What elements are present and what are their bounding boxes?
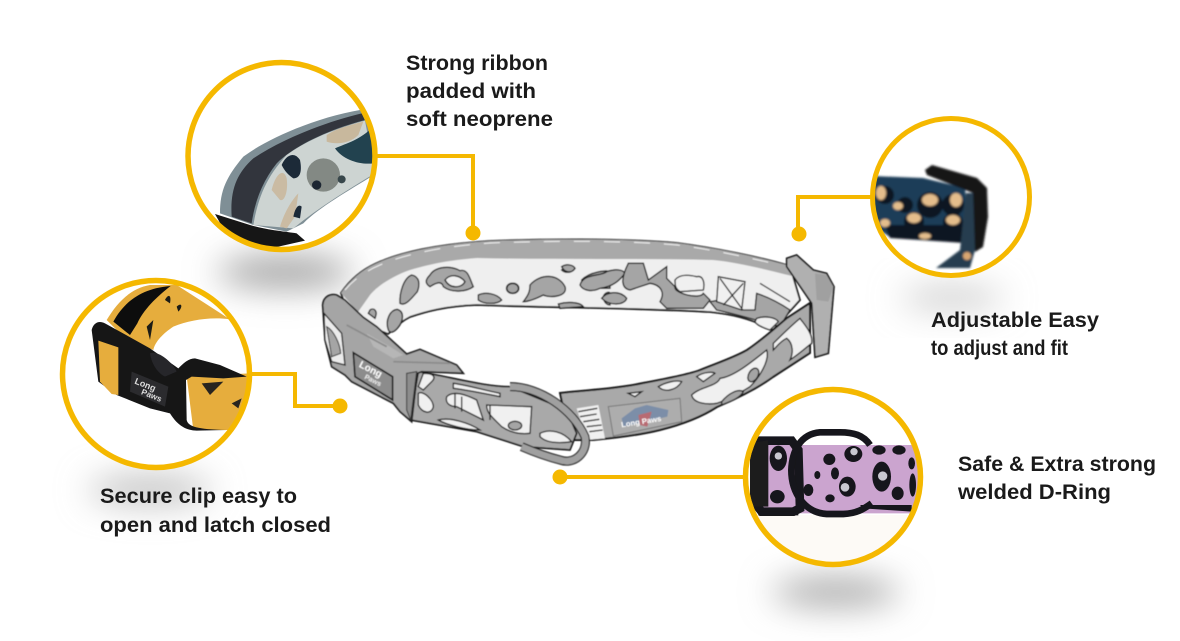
plastic clasp: Long (357, 360, 384, 380)
buckle edge (215, 214, 305, 250)
back band stitching (345, 241, 780, 290)
lower strap (936, 193, 975, 268)
text: clip callout: Secure clip easy to (100, 485, 297, 508)
clasp ridge (367, 333, 403, 358)
back band spots, right half (562, 263, 790, 330)
back band spots, left half (368, 266, 610, 332)
text: clip callout (100, 485, 331, 537)
navy strap (872, 176, 970, 240)
shadow: D-ring circle (772, 578, 900, 606)
text: ribbon callout: Strong ribbon (406, 52, 548, 75)
panel: ribbon close-up (188, 62, 377, 250)
collar illustration (323, 239, 834, 461)
plastic slider (755, 441, 800, 512)
text: clip callout: open and latch closed (100, 514, 331, 537)
clasp slot (407, 372, 417, 420)
logo patch (608, 398, 682, 436)
metal D-ring (791, 432, 872, 514)
yellow back strap (107, 285, 230, 350)
black padding (113, 286, 171, 335)
front band (560, 303, 810, 440)
buckle tab (150, 353, 177, 377)
text: adjustable callout (931, 309, 1099, 360)
back band padding (341, 239, 792, 312)
D-ring (510, 387, 585, 461)
white table below strap (758, 515, 908, 562)
connector: adjustable callout (792, 197, 873, 242)
buckle label: Paws (140, 387, 164, 404)
front band tail (577, 405, 605, 440)
panel: D-ring close-up (746, 390, 927, 567)
front band spots (628, 318, 812, 405)
shadow: clip circle (88, 476, 212, 504)
panel: adjustable close-up (872, 118, 1030, 276)
buckle (925, 165, 988, 252)
text: D-ring callout (957, 453, 1156, 504)
shadow: adjustable circle (900, 288, 1004, 308)
connector: D-ring callout (552, 470, 746, 484)
connector: clip callout (250, 374, 348, 414)
clasp window (324, 313, 345, 365)
connector: ribbon callout (375, 156, 480, 240)
text: adjustable callout: to adjust and fit (931, 337, 1068, 360)
logo patch: Long Paws (621, 414, 662, 429)
panel: clip close-up (62, 280, 250, 468)
text: adjustable callout: Adjustable Easy (931, 309, 1099, 332)
text: ribbon callout (406, 52, 553, 131)
text: ribbon callout: soft neoprene (406, 108, 553, 131)
buckle label (130, 372, 168, 407)
shadow: ribbon circle (217, 256, 353, 288)
right buckle (787, 255, 834, 357)
buckle window (98, 341, 118, 395)
strap to D-ring (410, 372, 585, 461)
ribbon pattern (253, 121, 375, 228)
neoprene padding (231, 113, 365, 223)
black buckle (92, 322, 247, 431)
clasp label (353, 353, 393, 400)
text: ribbon callout: padded with (406, 80, 536, 103)
plastic clasp: Paws (363, 374, 382, 388)
text: D-ring callout: Safe & Extra strong (958, 453, 1156, 476)
ribbon outer edge (220, 110, 377, 232)
pink strap (760, 445, 923, 513)
back band (341, 239, 800, 334)
yellow front strap (187, 373, 250, 430)
text: D-ring callout: welded D-Ring (957, 481, 1111, 504)
plastic clasp (323, 295, 463, 422)
buckle label: Long (133, 376, 157, 393)
strap mark (202, 382, 223, 395)
